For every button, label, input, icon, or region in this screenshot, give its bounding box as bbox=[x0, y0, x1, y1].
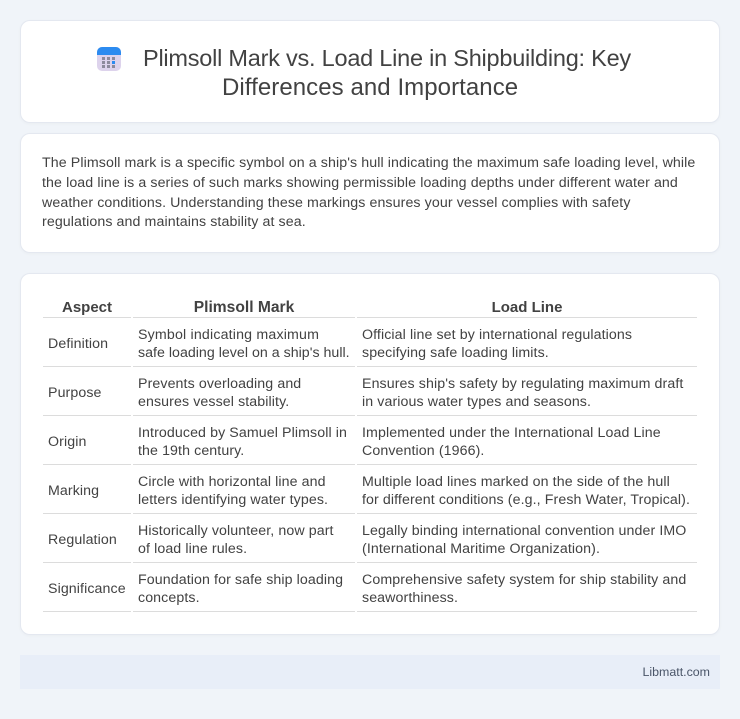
row: Origin: Implemented under the International Load Line bbox=[362, 425, 661, 441]
row: Definition bbox=[48, 327, 632, 361]
row: Significance bbox=[48, 572, 686, 606]
row: Definition: Definition bbox=[48, 336, 108, 352]
row: Origin bbox=[48, 425, 661, 459]
row: Marking: Multiple load lines marked on the side of the hull bbox=[362, 474, 670, 490]
row: Significance: seaworthiness. bbox=[362, 590, 458, 606]
row: Marking: for different conditions (e.g., Fresh Water, Tropical). bbox=[362, 492, 690, 508]
row: Origin: Origin bbox=[48, 434, 86, 450]
intro text: regulations and maintains stability at sea. bbox=[42, 214, 306, 230]
header: Aspect: Aspect bbox=[62, 299, 112, 316]
row: Significance: concepts. bbox=[138, 590, 200, 606]
intro text: The Plimsoll mark is a specific symbol on a ship's hull indicating the maximum safe loading level, while bbox=[42, 155, 695, 171]
row: Definition: Official line set by international regulations bbox=[362, 327, 632, 343]
row: Regulation: Legally binding international convention under IMO bbox=[362, 523, 686, 539]
row: Purpose: Purpose bbox=[48, 385, 102, 401]
row: Regulation bbox=[48, 523, 686, 557]
icon: calendar bbox=[97, 47, 121, 71]
row: Purpose: Prevents overloading and bbox=[138, 376, 301, 392]
intro text: the load line is a series of such marks showing permissible loading depths under different water and bbox=[42, 175, 678, 191]
row: Purpose bbox=[48, 376, 684, 410]
row: Origin: Convention (1966). bbox=[362, 443, 484, 459]
row: Definition: specifying safe loading limits. bbox=[362, 345, 549, 361]
header: Load Line: Load Line bbox=[492, 299, 562, 316]
panel: title card bbox=[20, 20, 720, 123]
panel: intro bbox=[20, 133, 720, 253]
row: Regulation: (International Maritime Organization). bbox=[362, 541, 600, 557]
panel: comparison table bbox=[20, 273, 720, 635]
row: Marking bbox=[48, 474, 690, 508]
row: Marking: Marking bbox=[48, 483, 99, 499]
row: Regulation: of load line rules. bbox=[138, 541, 247, 557]
footer text: Libmatt.com bbox=[643, 665, 710, 679]
row: Marking: Circle with horizontal line and bbox=[138, 474, 326, 490]
row: Purpose: in various water types and seasons. bbox=[362, 394, 591, 410]
row: Origin: the 19th century. bbox=[138, 443, 244, 459]
row: Purpose: Ensures ship's safety by regulating maximum draft bbox=[362, 376, 683, 392]
row: Marking: letters identifying water types. bbox=[138, 492, 328, 508]
footer bar bbox=[20, 655, 720, 689]
row: Purpose: ensures vessel stability. bbox=[138, 394, 289, 410]
row: Regulation: Regulation bbox=[48, 532, 117, 548]
row: Significance: Significance bbox=[48, 581, 126, 597]
intro text: weather conditions. Understanding these markings ensures your vessel complies with safety bbox=[42, 195, 631, 211]
row: Definition: safe loading level on a ship's hull. bbox=[138, 345, 350, 361]
row: Significance: Foundation for safe ship loading bbox=[138, 572, 343, 588]
row: Significance: Comprehensive safety system for ship stability and bbox=[362, 572, 686, 588]
title: Plimsoll Mark vs. Load Line in Shipbuilding: Key bbox=[143, 45, 631, 71]
header: Plimsoll Mark: Plimsoll Mark bbox=[194, 299, 294, 316]
title bbox=[143, 45, 631, 101]
row: Regulation: Historically volunteer, now part bbox=[138, 523, 334, 539]
row: Definition: Symbol indicating maximum bbox=[138, 327, 319, 343]
title: Differences and Importance bbox=[222, 74, 518, 101]
intro text bbox=[42, 155, 695, 230]
table header bbox=[62, 299, 562, 316]
row: Origin: Introduced by Samuel Plimsoll in bbox=[138, 425, 347, 441]
